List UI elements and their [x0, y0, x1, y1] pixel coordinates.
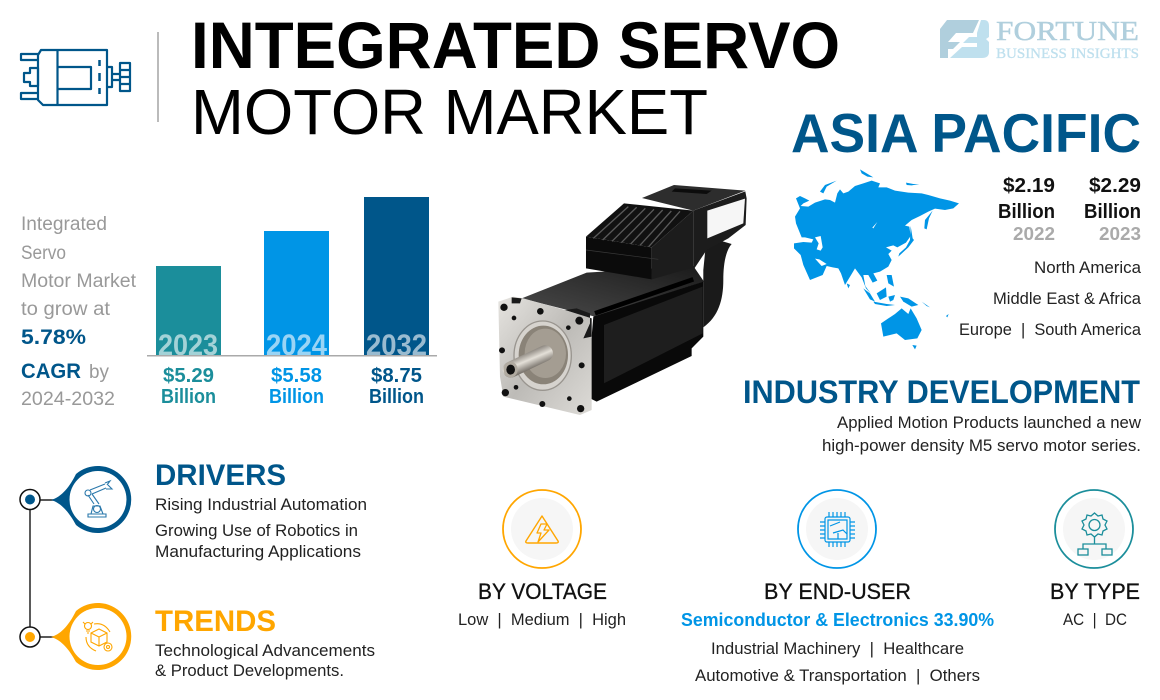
logo: Fortune Business Insights — [940, 16, 1139, 62]
drivers text: Rising Industrial Automation — [155, 495, 367, 514]
icon: robot arm pin — [51, 466, 131, 533]
Asia Pacific 2022 value — [998, 175, 1055, 244]
industry development: Applied Motion Products launched a new — [837, 414, 1141, 432]
bar 2023: 2023 — [158, 329, 218, 362]
Asia Pacific 2023 value: 2023 — [1099, 224, 1141, 244]
bar 2024: 2024 — [266, 329, 327, 362]
growth text: CAGR — [21, 360, 81, 383]
icon: voltage — [503, 490, 581, 568]
by type text: BY TYPE — [1050, 579, 1140, 604]
bar 2023: Billion — [161, 386, 216, 408]
bar 2032: 2032 — [366, 329, 427, 362]
logo: Fortune Business Insights: BUSINESS INSIGHTS — [996, 46, 1139, 62]
other regions: North America — [1034, 258, 1142, 277]
logo: Fortune Business Insights: FORTUNE — [996, 16, 1139, 46]
growth text: 2024-2032 — [21, 389, 115, 410]
bar 2024: $5.58 — [271, 365, 322, 387]
by type text — [1050, 579, 1140, 629]
drivers text: Growing Use of Robotics in — [155, 521, 358, 540]
drivers text — [155, 459, 367, 561]
growth text: by — [89, 362, 109, 383]
other regions — [959, 258, 1142, 339]
Asia Pacific 2022 value: $2.19 — [1003, 175, 1055, 197]
trends text: TRENDS — [155, 605, 276, 638]
by end-user text: BY END-USER — [764, 579, 911, 604]
by end-user text — [681, 579, 994, 685]
by voltage text — [458, 579, 626, 629]
Asia Pacific 2023 value: $2.29 — [1089, 175, 1141, 197]
by end-user text: Automotive & Transportation | Others — [695, 666, 980, 685]
trends text: Technological Advancements — [155, 641, 375, 660]
bar 2032 — [364, 197, 429, 408]
Asia Pacific 2023 value: Billion — [1084, 201, 1141, 223]
growth text: Motor Market — [21, 271, 137, 292]
other regions: Middle East & Africa — [993, 289, 1142, 308]
title: INTEGRATED SERVO — [191, 8, 840, 82]
bar chart — [147, 197, 437, 408]
bar 2032: $8.75 — [371, 365, 422, 387]
bar 2024: Billion — [269, 386, 324, 408]
icon: chip — [798, 490, 876, 568]
growth text — [21, 214, 137, 410]
Asia Pacific 2022 value: Billion — [998, 201, 1055, 223]
by type text: AC | DC — [1063, 610, 1127, 629]
growth text: to grow at — [21, 299, 111, 320]
growth text: Servo — [21, 243, 66, 264]
drivers text: DRIVERS — [155, 459, 286, 492]
heading: Asia Pacific: ASIA PACIFIC — [791, 102, 1141, 164]
divider — [157, 32, 159, 122]
motor photo — [498, 185, 747, 415]
title: MOTOR MARKET — [191, 76, 708, 148]
title — [191, 8, 840, 148]
bar 2023 — [156, 266, 221, 408]
icon: product development pin — [51, 603, 131, 670]
industry development — [743, 374, 1141, 455]
growth text: Integrated — [21, 214, 107, 235]
drivers text: Manufacturing Applications — [155, 542, 361, 561]
other regions: Europe | South America — [959, 320, 1142, 339]
growth text: 5.78% — [21, 326, 86, 349]
icon: gear network — [1055, 490, 1133, 568]
by end-user text: Semiconductor & Electronics 33.90% — [681, 610, 994, 630]
Asia Pacific 2022 value: 2022 — [1013, 224, 1055, 244]
trends text: & Product Developments. — [155, 661, 344, 680]
by voltage text: BY VOLTAGE — [478, 579, 607, 604]
industry development: INDUSTRY DEVELOPMENT — [743, 374, 1140, 410]
bar 2024 — [264, 231, 329, 408]
by end-user text: Industrial Machinery | Healthcare — [711, 639, 964, 658]
map: Asia Pacific — [794, 169, 959, 349]
timeline connector — [20, 490, 60, 647]
industry development: high-power density M5 servo motor series. — [822, 437, 1141, 455]
trends text — [155, 605, 375, 680]
Asia Pacific 2023 value — [1084, 175, 1141, 244]
bar 2032: Billion — [369, 386, 424, 408]
motor face plate — [498, 297, 592, 415]
icon: motor — [21, 50, 130, 105]
bar 2023: $5.29 — [163, 365, 214, 387]
by voltage text: Low | Medium | High — [458, 610, 626, 629]
